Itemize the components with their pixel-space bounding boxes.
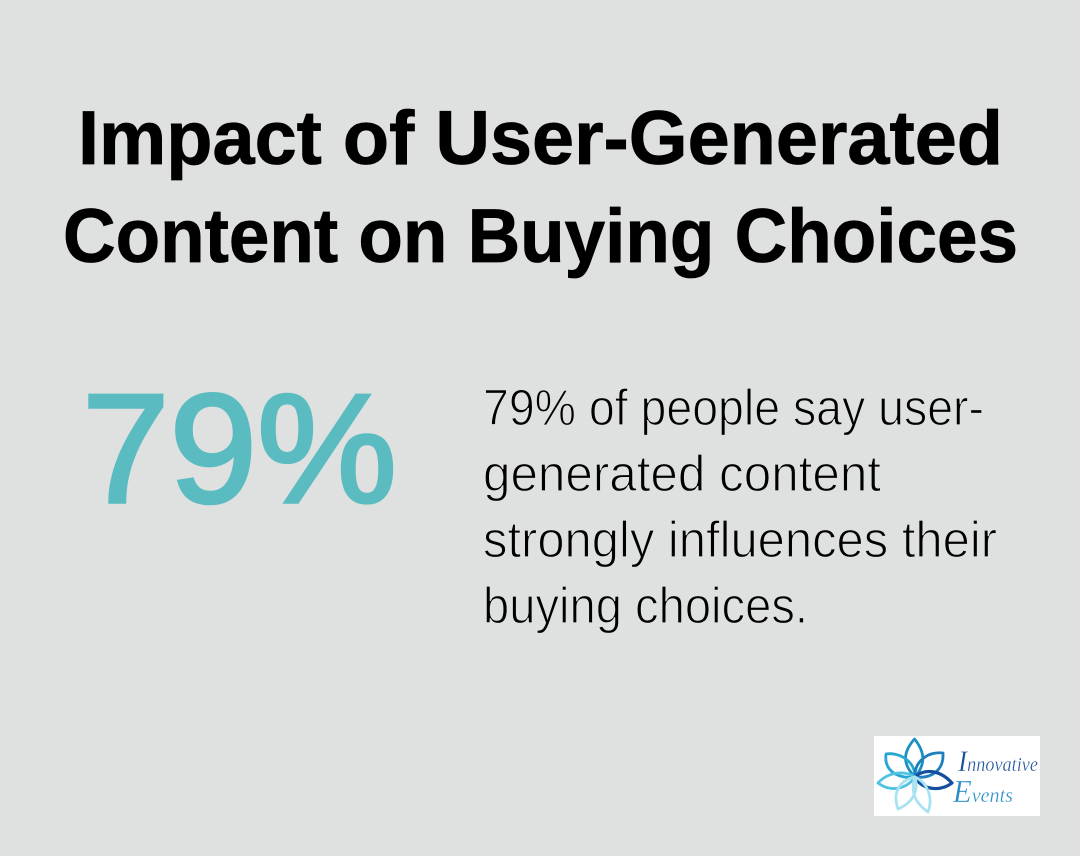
description text: buying choices. [483,577,808,634]
description text [483,379,997,634]
logo text [952,745,1038,809]
description text: strongly influences their [483,511,997,568]
description text: 79% of people say user- [483,379,984,436]
logo text: Events [952,773,1013,809]
title: Content on Buying Choices [63,194,1018,279]
description text: generated content [483,445,881,502]
title: Impact of User-Generated [78,96,1003,181]
big statistic: 79%: 79% [82,362,397,535]
title [63,96,1018,279]
icon: flower [878,739,952,812]
logo: Innovative Events [874,736,1040,816]
logo text: Innovative [957,745,1038,778]
